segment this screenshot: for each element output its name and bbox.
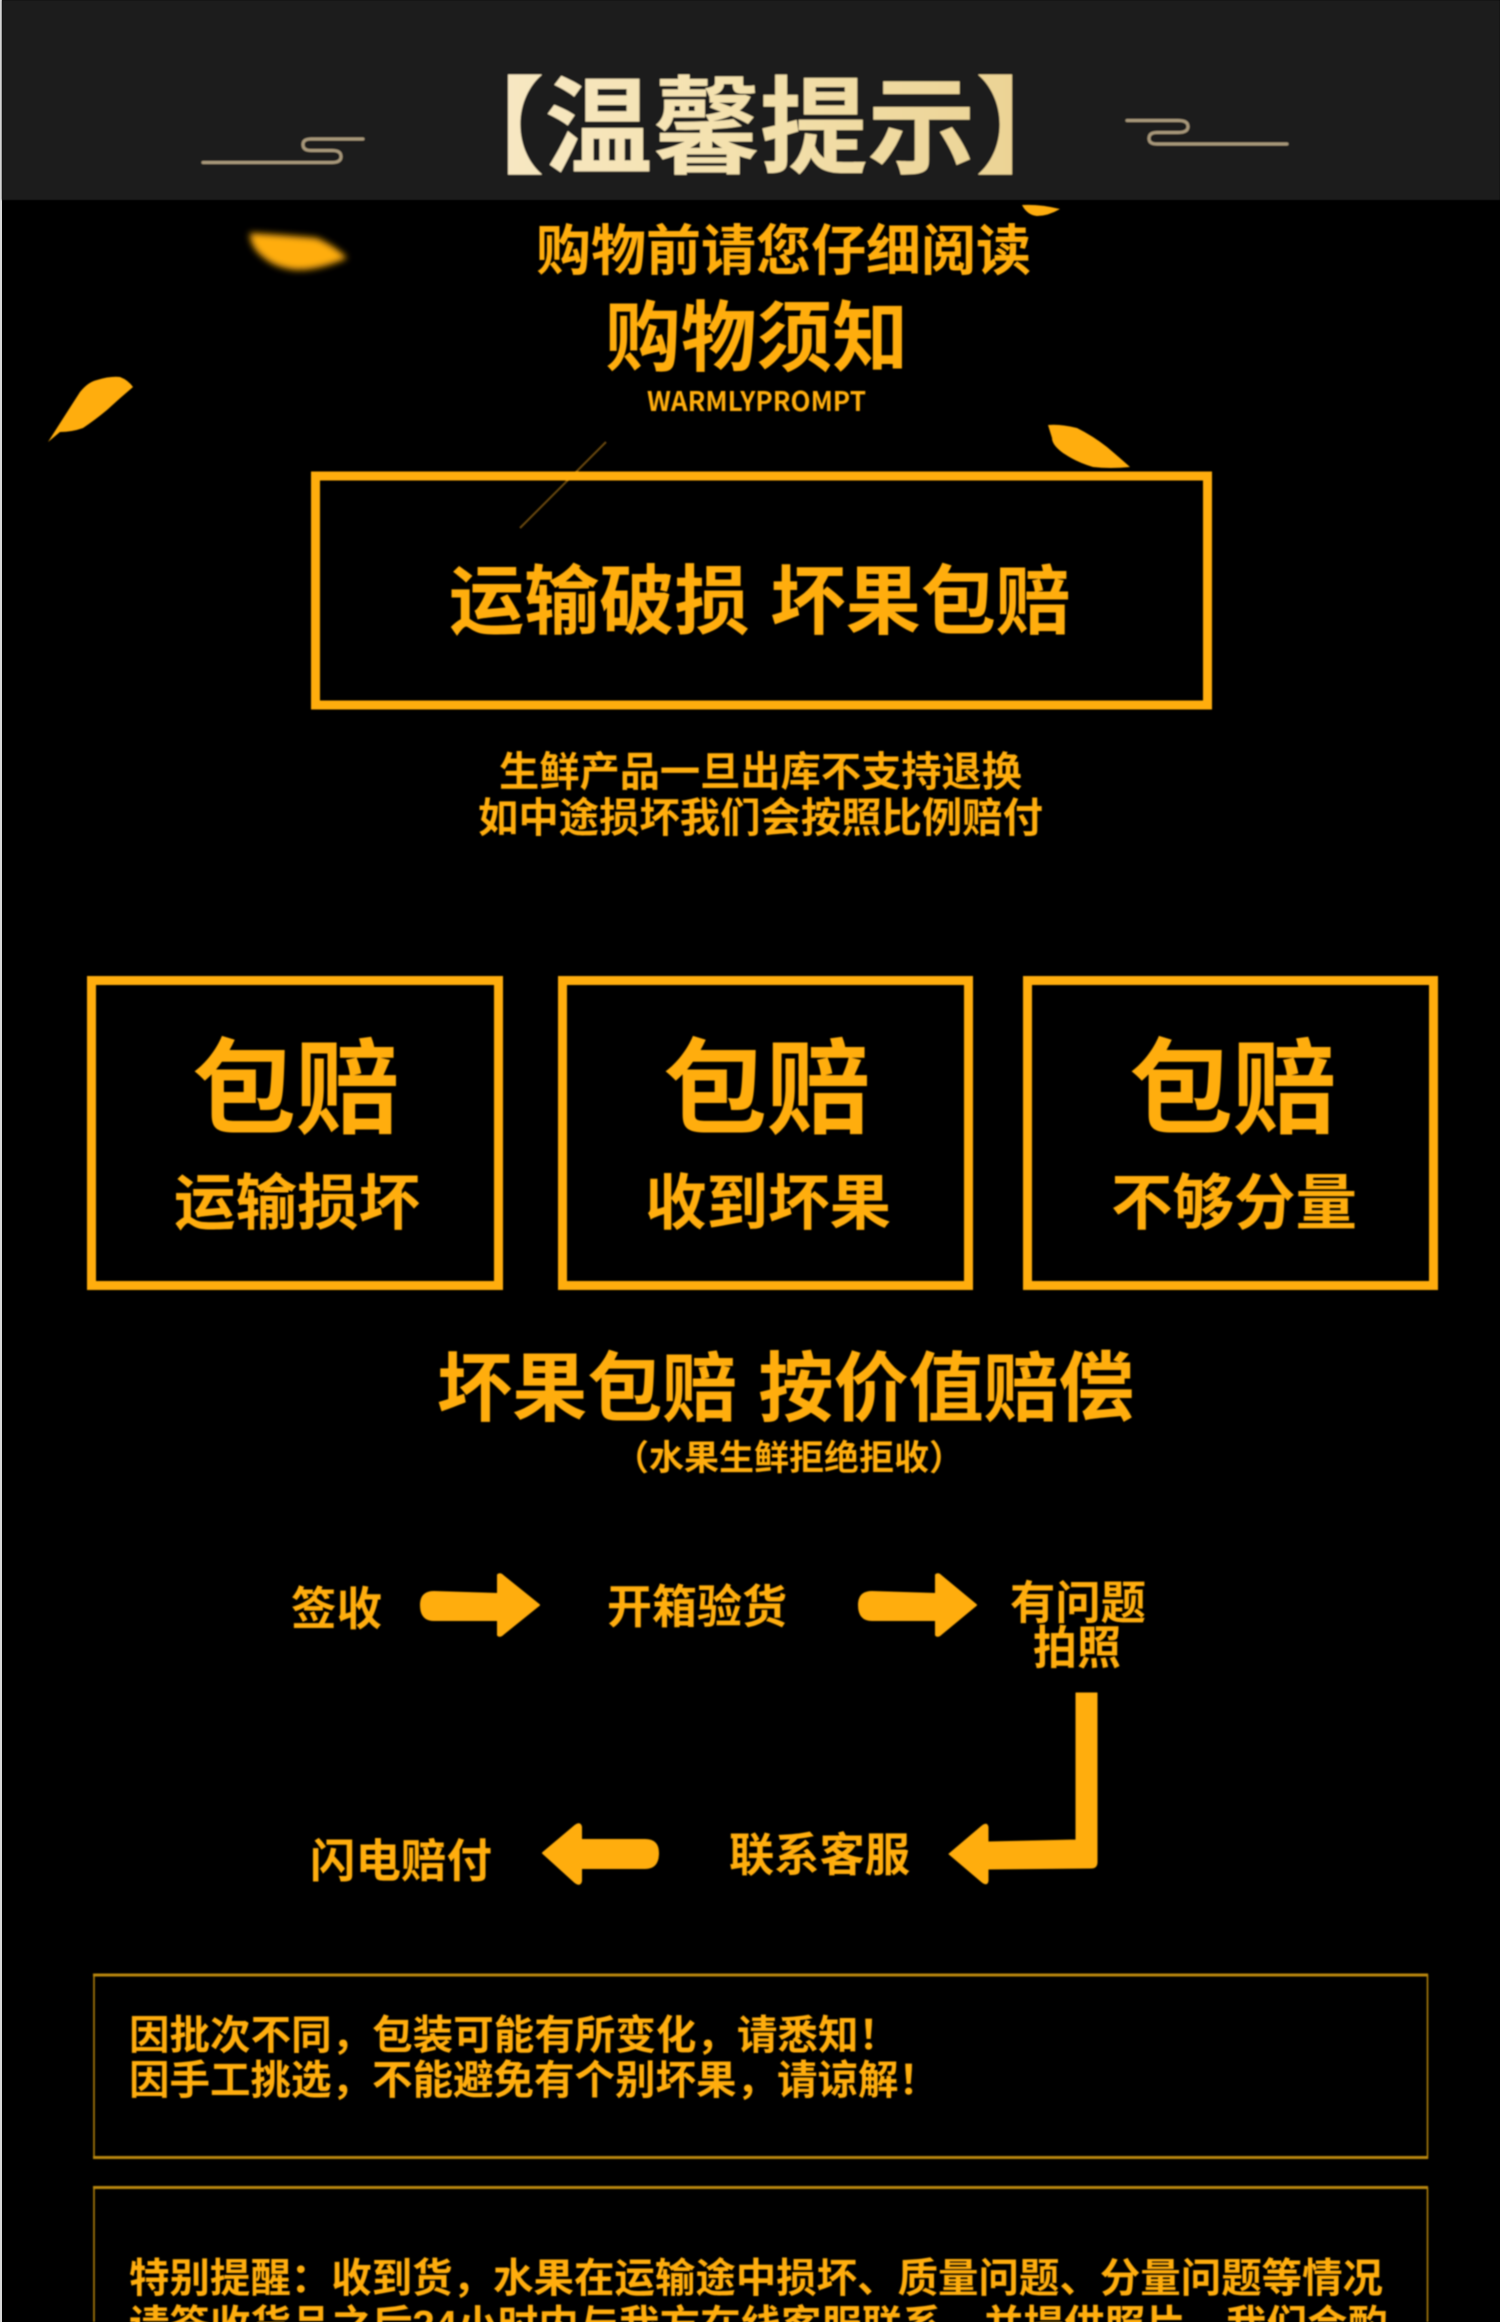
flow step: photo if problem: 有问题 bbox=[1010, 1577, 1146, 1629]
panel: bad fruit received: 收到坏果 bbox=[645, 1169, 891, 1237]
leaf: left bbox=[48, 377, 133, 442]
flow step: open and inspect: 开箱验货 bbox=[607, 1581, 787, 1633]
leaf: top right small bbox=[1022, 205, 1060, 216]
arrow: sign to inspect bbox=[421, 1574, 539, 1636]
arrow: photo to customer service bbox=[949, 1693, 1097, 1884]
diagonal thin line bbox=[520, 442, 606, 528]
panel: short weight bbox=[1028, 980, 1434, 1286]
header band bbox=[2, 0, 1500, 200]
heading: shopping notice: 购物须知 bbox=[605, 296, 908, 382]
panel: transport damage bbox=[92, 980, 498, 1286]
panel: short weight: 包赔 bbox=[1129, 1032, 1337, 1148]
panel: packaging note: 因手工挑选，不能避免有个别坏果，请谅解！ bbox=[129, 2057, 939, 2103]
panel: main guarantee bbox=[316, 476, 1208, 705]
panel: short weight: 不够分量 bbox=[1111, 1169, 1357, 1237]
note: do not refuse fruit: （水果生鲜拒绝拒收） bbox=[614, 1439, 964, 1478]
panel: special reminder: 特别提醒：收到货，水果在运输途中损坏、质量问题、分量问题等情况 bbox=[129, 2255, 1383, 2301]
leaf: right above box bbox=[1048, 425, 1130, 468]
leaf: blurred top left bbox=[250, 233, 347, 270]
panel: transport damage: 运输损坏 bbox=[174, 1169, 420, 1237]
subtitle: read before purchase: 购物前请您仔细阅读 bbox=[536, 220, 1031, 282]
text block: no returns policy bbox=[478, 749, 1043, 841]
flow step: photo if problem bbox=[1010, 1577, 1146, 1674]
flow step: lightning compensation: 闪电赔付 bbox=[310, 1835, 492, 1887]
panel: bad fruit received bbox=[562, 980, 968, 1286]
text block: no returns policy: 生鲜产品一旦出库不支持退换 bbox=[499, 749, 1022, 795]
ornament: right cloud line bbox=[1127, 120, 1287, 144]
panel: packaging note: 因批次不同，包装可能有所变化，请悉知！ bbox=[129, 2012, 899, 2058]
panel: special reminder bbox=[93, 2186, 1428, 2322]
flow step: sign: 签收 bbox=[291, 1583, 382, 1635]
arrow: inspect to photo bbox=[859, 1574, 976, 1636]
panel: bad fruit received: 包赔 bbox=[663, 1032, 871, 1148]
flow step: photo if problem: 拍照 bbox=[1033, 1622, 1121, 1674]
title: 【温馨提示】 bbox=[437, 70, 1083, 188]
guarantee text: 运输破损 坏果包赔 bbox=[449, 560, 1071, 645]
flow step: contact service: 联系客服 bbox=[729, 1829, 910, 1881]
panel: transport damage: 包赔 bbox=[192, 1032, 400, 1148]
heading: compensation by value: 坏果包赔 按价值赔偿 bbox=[437, 1347, 1134, 1432]
panel: packaging note bbox=[93, 1974, 1428, 2159]
ornament: left cloud line bbox=[203, 139, 363, 162]
text block: no returns policy: 如中途损坏我们会按照比例赔付 bbox=[478, 795, 1043, 841]
english caption: WARMLYPROMPT bbox=[647, 380, 866, 419]
arrow: service to compensation bbox=[543, 1824, 658, 1884]
